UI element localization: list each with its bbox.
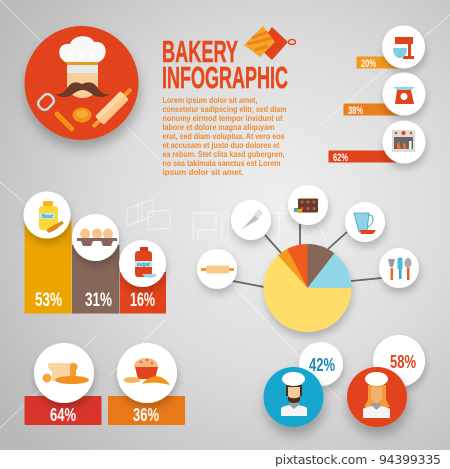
body text: ipsum dolor sit amet. [162,168,244,177]
bar: eggs 31%: 31% [85,290,112,311]
bar: flour 53% [24,192,72,314]
watermark [127,199,326,240]
body text: labore et dolore magna aliquyam [162,123,274,132]
body text: consetetur sadipscing elitr, sed diam [162,105,286,114]
footer strip: pixtastock.com - 94399335 [275,452,441,467]
icon: flour jar: flour [42,214,53,220]
icon: bun [72,108,92,122]
62% oven bar: 62% [333,152,348,164]
icon: sugar jar: sugar [137,262,150,268]
body text: nonumy eirmod tempor invidunt ut [162,114,283,123]
20% mixer bar: 20% [361,58,376,70]
card: breads 64%: 64% [50,405,76,425]
body text: Lorem ipsum dolor sit amet, [162,96,258,105]
20% mixer bar [356,26,425,70]
icon: male chef [281,372,307,416]
chocolate tray circle [288,185,328,225]
icon: oven [392,130,415,152]
male chef 42% [264,342,343,427]
icon: chef face [67,73,98,98]
icon: female chef [363,372,390,418]
38% scale bar: 38% [348,105,363,117]
pie chart [264,244,352,332]
male chef 42%: 42% [309,355,335,375]
body text: et accusam et justo duo dolores et [162,141,280,150]
icon: whisk [36,92,75,132]
title: INFOGRAPHIC [162,60,288,95]
icon: rolling pin [89,85,135,131]
footer strip [0,450,450,469]
icon: kitchen scale [393,87,415,104]
38% scale bar [344,72,426,117]
icon: oven mitts [244,26,296,60]
rolling pin circle [197,249,237,289]
utensils circle [379,248,419,288]
bar: flour 53%: 53% [35,290,62,311]
body text: erat, sed diam voluptua. At vero eos [162,132,285,141]
bar: sugar 16%: 16% [130,290,155,311]
icon: muffin and pastries [124,358,170,385]
icon: mixer [393,37,414,59]
bar: eggs 31% [72,214,120,314]
icon: moustache [55,82,110,97]
title: BAKERY [162,34,238,69]
body text: no sea takimata sanctus est Lorem [162,159,280,168]
bar: sugar 16% [119,240,166,314]
body text: ea rebum. Stet clita kasd gubergren, [162,150,284,159]
title [162,34,288,95]
piping bag circle [231,200,271,240]
female chef 58%: 58% [390,352,416,372]
body text [162,96,286,177]
measuring jug circle [345,202,385,242]
card: breads 64% [24,343,102,425]
62% oven bar [328,120,426,164]
connector lines [233,224,382,287]
icon: bread [42,363,89,384]
card: pastries 36%: 36% [133,405,159,425]
icon: eggs tray [77,228,117,246]
icon: chef hat [59,36,106,74]
card: pastries 36% [108,343,185,425]
female chef 58% [347,335,425,427]
chef emblem [24,26,138,140]
pie chart group [197,185,419,332]
